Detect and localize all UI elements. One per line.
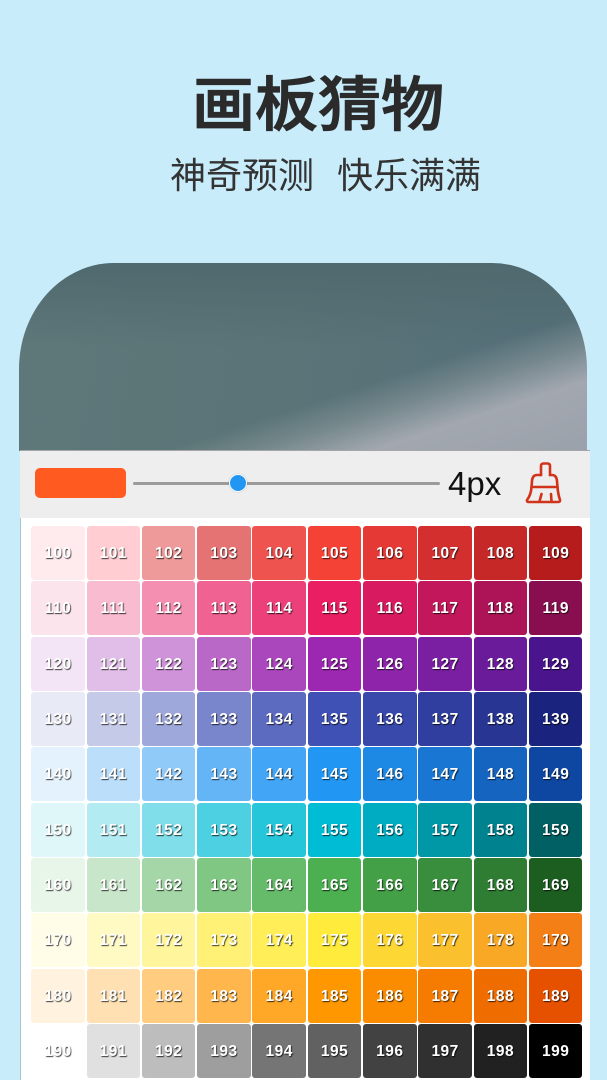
palette row 150: 159: [542, 822, 569, 839]
palette row 120: 125: [321, 656, 348, 673]
palette row 190: 199: [542, 1043, 569, 1060]
palette row 180: 185: [321, 988, 348, 1005]
palette row 170: [31, 913, 582, 967]
palette row 110: 115: [321, 600, 348, 617]
palette row 170: 176: [376, 932, 404, 949]
palette row 160: 160: [44, 877, 72, 894]
palette row 150: [31, 803, 582, 857]
palette row 140: 141: [100, 766, 127, 783]
palette row 170: 174: [266, 932, 293, 949]
palette row 170: 178: [487, 932, 514, 949]
palette row 170: 175: [321, 932, 348, 949]
palette row 160: 165: [321, 877, 348, 894]
subtitle: [170, 147, 481, 199]
panel: canvas drawing area: [19, 263, 587, 451]
palette row 140: 148: [487, 766, 514, 783]
palette row 100: 102: [155, 545, 182, 562]
palette row 110: 114: [266, 600, 292, 617]
palette row 190: 192: [155, 1043, 182, 1060]
palette row 190: 195: [321, 1043, 348, 1060]
palette row 150: 157: [431, 822, 459, 839]
palette row 130: 134: [266, 711, 293, 728]
palette row 190: 196: [376, 1043, 404, 1060]
palette row 110: 112: [155, 600, 182, 617]
palette row 100: 100: [44, 545, 72, 562]
palette row 170: 170: [44, 932, 72, 949]
palette row 110: 116: [377, 600, 403, 617]
panel: colour palette: [20, 518, 590, 1080]
palette row 160: 163: [210, 877, 238, 894]
palette row 190: 197: [431, 1043, 459, 1060]
palette row 120: [31, 637, 582, 691]
palette row 130: 131: [100, 711, 127, 728]
palette row 160: 161: [100, 877, 127, 894]
palette row 190: 194: [266, 1043, 293, 1060]
palette row 150: 156: [376, 822, 404, 839]
palette row 140: [31, 747, 582, 801]
palette row 120: 128: [487, 656, 514, 673]
palette row 130: 130: [44, 711, 72, 728]
palette row 160: 166: [376, 877, 404, 894]
palette row 140: 144: [266, 766, 293, 783]
palette row 100: 108: [487, 545, 514, 562]
palette row 140: 143: [210, 766, 238, 783]
palette row 120: 126: [376, 656, 404, 673]
palette row 100: 101: [100, 545, 127, 562]
palette row 100: 103: [210, 545, 238, 562]
palette row 130: 139: [542, 711, 569, 728]
subtitle: 快乐满满: [337, 147, 481, 199]
panel: toolbar: [20, 450, 590, 518]
palette row 110: 117: [432, 600, 458, 617]
palette row 160: 169: [542, 877, 569, 894]
palette row 130: 132: [155, 711, 182, 728]
palette row 100: 107: [431, 545, 459, 562]
subtitle: 神奇预测: [170, 147, 314, 199]
palette row 140: 142: [155, 766, 182, 783]
palette row 180: 189: [542, 988, 569, 1005]
palette row 140: 147: [431, 766, 459, 783]
palette row 180: 183: [210, 988, 238, 1005]
palette row 180: [31, 969, 582, 1023]
palette row 180: 182: [155, 988, 182, 1005]
palette row 170: 177: [431, 932, 459, 949]
palette row 100: [31, 526, 582, 580]
palette row 190: 190: [44, 1043, 72, 1060]
palette row 130: 133: [210, 711, 238, 728]
palette row 120: 123: [210, 656, 238, 673]
selected colour swatch: [35, 468, 126, 498]
palette row 110: 113: [211, 600, 237, 617]
palette row 160: 162: [155, 877, 182, 894]
palette row 120: 124: [266, 656, 293, 673]
palette row 190: 198: [487, 1043, 514, 1060]
palette row 100: 105: [321, 545, 348, 562]
brush size slider: [133, 474, 440, 492]
palette row 170: 173: [210, 932, 238, 949]
palette row 150: 158: [487, 822, 514, 839]
palette row 140: 146: [376, 766, 404, 783]
palette row 130: 135: [321, 711, 348, 728]
palette row 150: 152: [155, 822, 182, 839]
icon: broom: [526, 462, 562, 504]
palette row 130: [31, 692, 582, 746]
palette row 130: 136: [376, 711, 404, 728]
palette row 180: 188: [487, 988, 514, 1005]
palette row 160: 167: [431, 877, 459, 894]
palette row 120: 122: [155, 656, 182, 673]
palette row 110: 111: [101, 600, 126, 617]
palette row 140: 145: [321, 766, 348, 783]
brush size label: 4px: [448, 465, 501, 502]
palette row 100: 104: [266, 545, 293, 562]
palette row 140: 140: [44, 766, 72, 783]
palette row 110: 110: [45, 600, 71, 617]
palette row 180: 187: [431, 988, 459, 1005]
palette row 150: 153: [210, 822, 238, 839]
palette row 160: 164: [266, 877, 293, 894]
palette row 150: 150: [44, 822, 72, 839]
palette row 170: 179: [542, 932, 569, 949]
palette row 180: 181: [100, 988, 127, 1005]
palette row 150: 154: [266, 822, 293, 839]
palette row 130: 138: [487, 711, 514, 728]
palette row 110: 118: [487, 600, 514, 617]
palette row 110: 119: [542, 600, 569, 617]
palette row 180: 186: [376, 988, 404, 1005]
palette row 170: 172: [155, 932, 182, 949]
palette row 150: 151: [100, 822, 127, 839]
palette row 160: 168: [487, 877, 514, 894]
palette row 180: 184: [266, 988, 293, 1005]
palette row 190: 193: [210, 1043, 238, 1060]
palette row 190: 191: [100, 1043, 127, 1060]
palette row 190: [44, 1024, 582, 1078]
title: 画板猜物: [192, 58, 444, 143]
palette row 120: 127: [431, 656, 459, 673]
palette row 150: 155: [321, 822, 348, 839]
palette row 160: [31, 858, 582, 912]
palette row 120: 120: [44, 656, 72, 673]
palette row 120: 129: [542, 656, 569, 673]
palette row 180: 180: [44, 988, 72, 1005]
palette row 100: 109: [542, 545, 569, 562]
palette row 130: 137: [431, 711, 459, 728]
palette row 120: 121: [100, 656, 127, 673]
palette row 140: 149: [542, 766, 569, 783]
palette row 100: 106: [376, 545, 404, 562]
palette row 110: [31, 581, 582, 635]
palette row 170: 171: [100, 932, 127, 949]
